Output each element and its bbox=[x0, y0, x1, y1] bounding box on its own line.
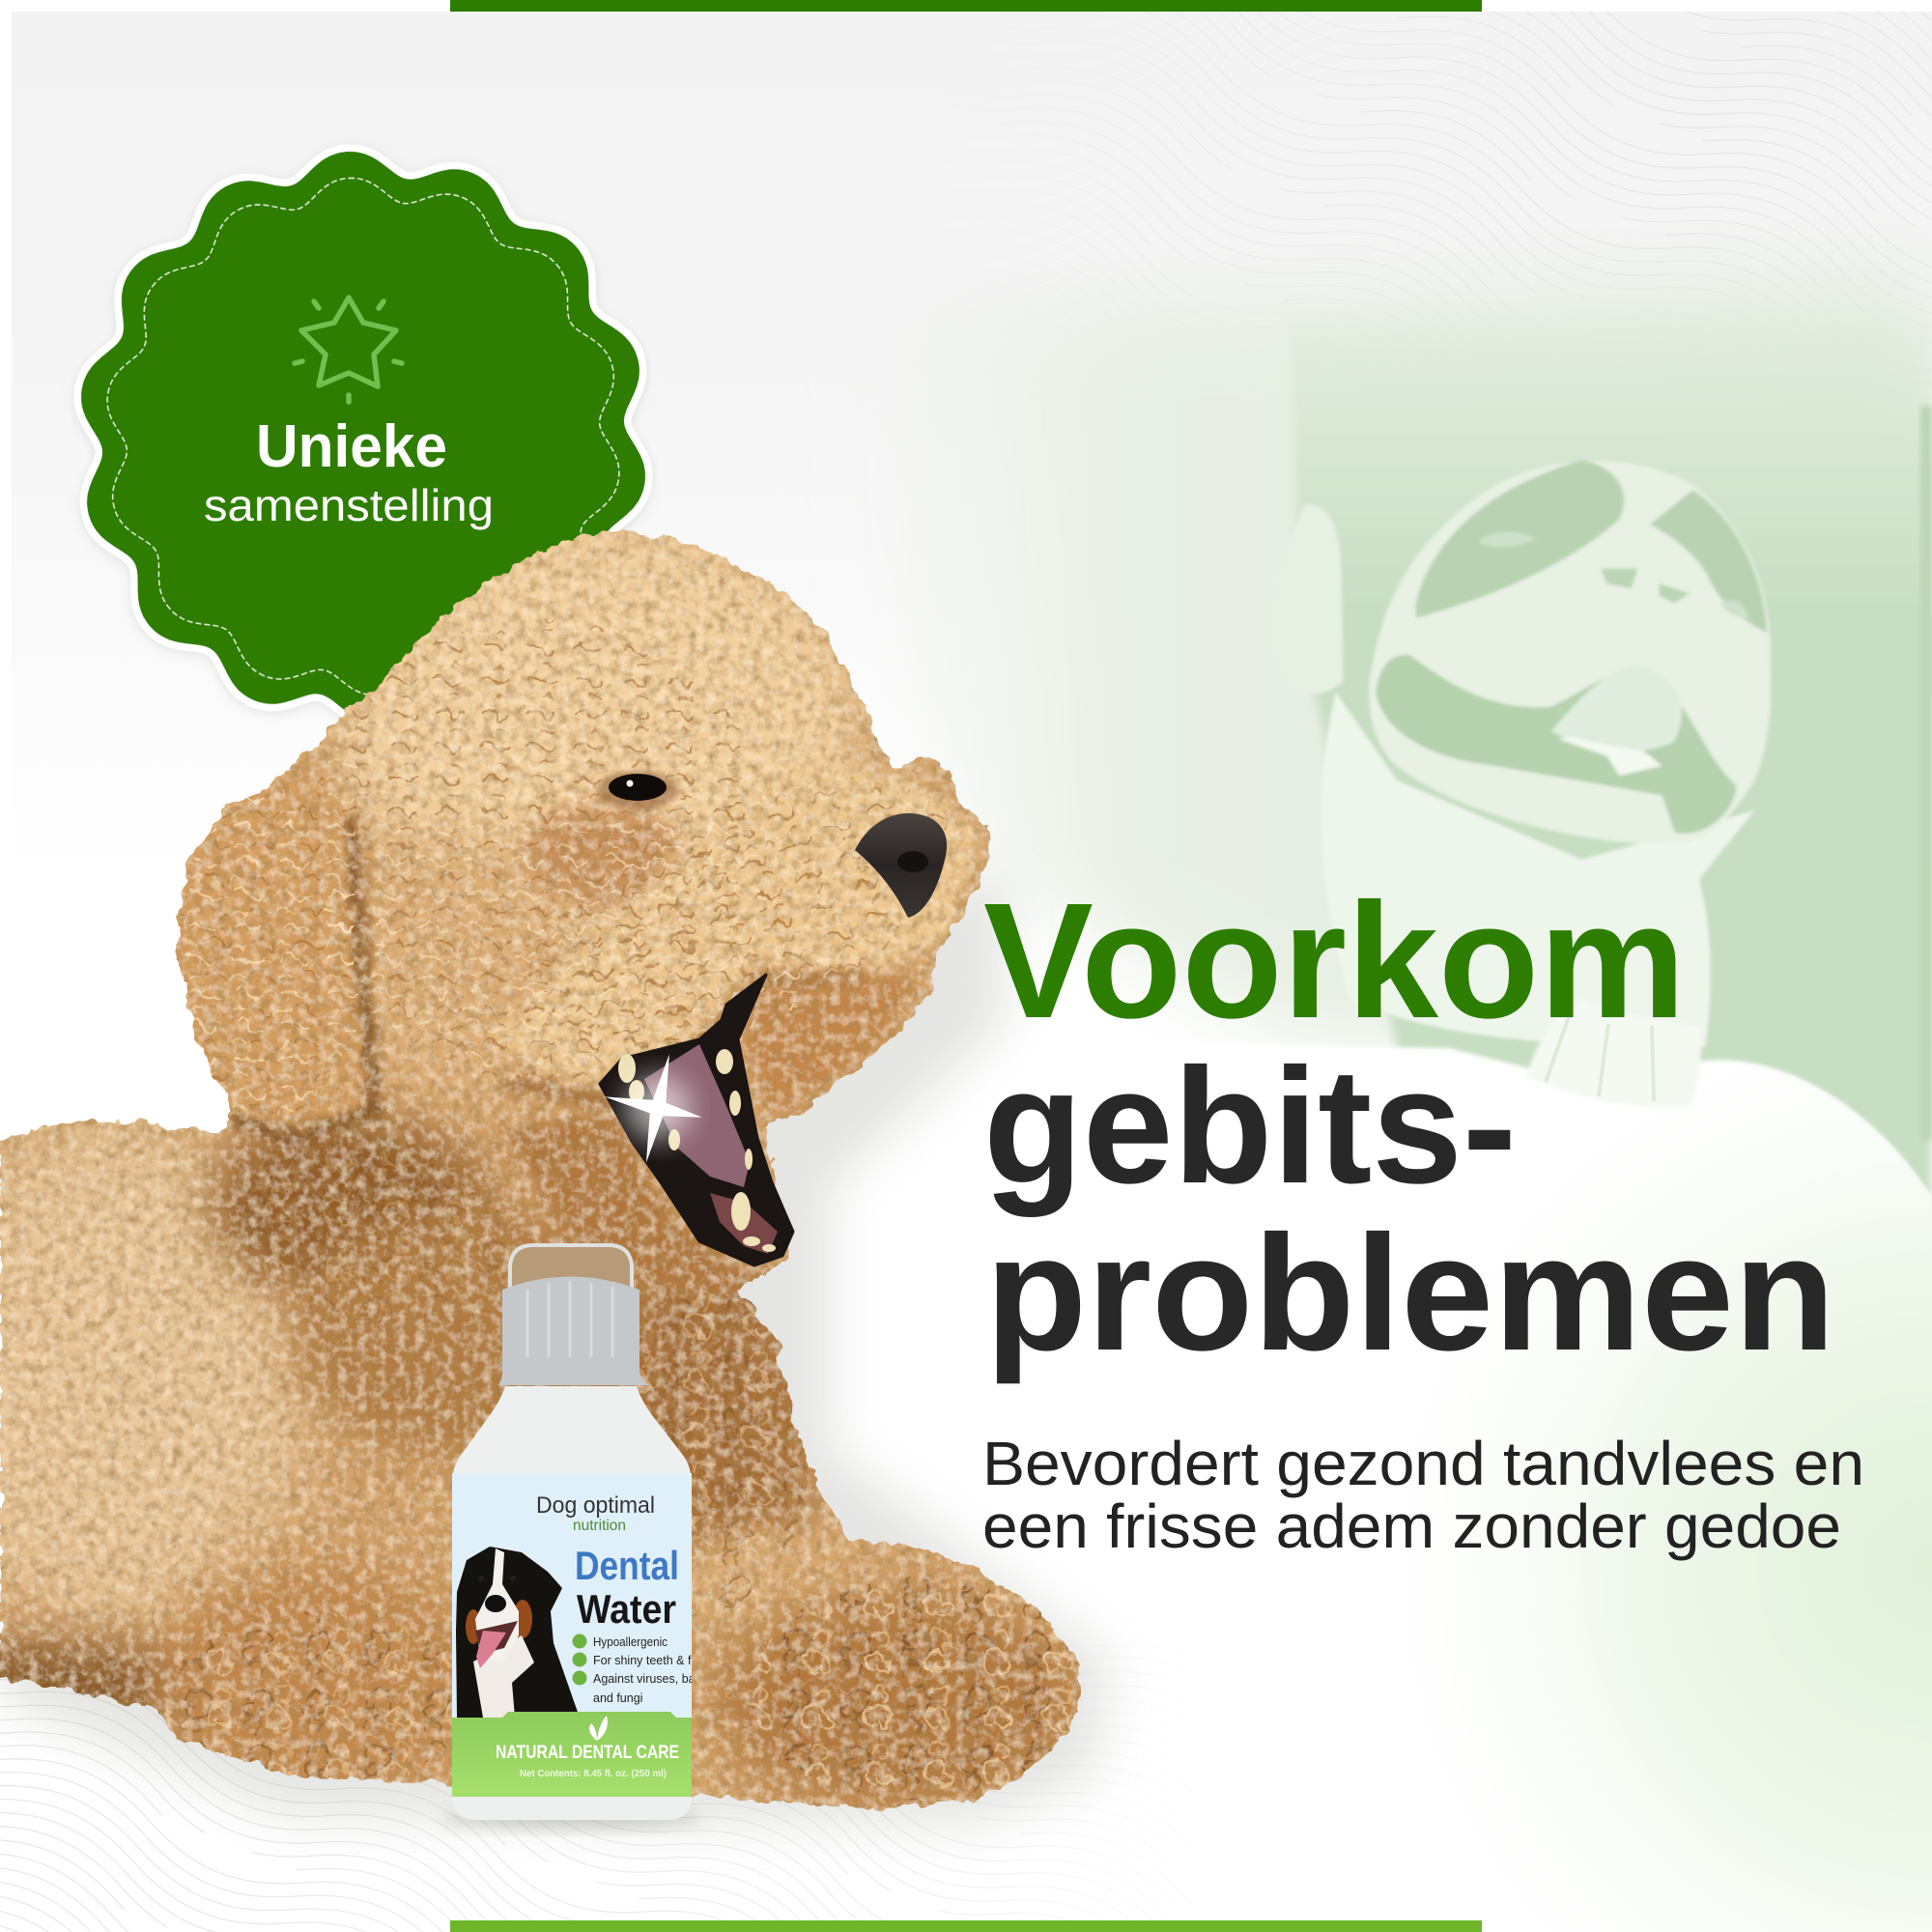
check bullets bbox=[572, 1634, 587, 1685]
dog head bbox=[1369, 461, 1771, 843]
bullet texts: For shiny teeth & fresh breath bbox=[593, 1654, 753, 1667]
neck shadow bbox=[208, 1116, 488, 1299]
chest bbox=[290, 1208, 657, 1459]
bullet texts: Hypoallergenic bbox=[593, 1635, 668, 1649]
subtext bbox=[982, 1429, 1864, 1561]
product word two: Water bbox=[577, 1586, 676, 1632]
pale person area bbox=[869, 270, 1932, 1063]
curl texture: foreleg bbox=[164, 1613, 473, 1787]
background: faded dog photo bbox=[869, 270, 1932, 1256]
lower-left belly bbox=[0, 1642, 213, 1729]
lower jaw fur bbox=[502, 1111, 744, 1304]
headline line three: problemen bbox=[985, 1202, 1835, 1385]
bullet texts: and fungi bbox=[593, 1691, 642, 1705]
bottle shoulder and body bbox=[452, 1386, 692, 1820]
headline line two: gebits- bbox=[983, 1035, 1517, 1218]
bottle bbox=[441, 1245, 753, 1830]
curl texture: chest bbox=[623, 1285, 807, 1613]
tongue bbox=[644, 1044, 750, 1187]
label background bbox=[452, 1473, 692, 1797]
ear crease bbox=[232, 821, 375, 1138]
bottom bar bbox=[450, 1920, 1482, 1932]
badge scalloped shape bbox=[41, 110, 686, 763]
fur base bbox=[0, 522, 1092, 1816]
green label band bbox=[452, 1712, 692, 1797]
foreleg top right bbox=[657, 1526, 889, 1642]
person collar bbox=[1268, 504, 1343, 694]
net contents: Net Contents: 8.45 fl. oz. (250 ml) bbox=[520, 1768, 667, 1779]
cap ridges bbox=[527, 1281, 612, 1357]
top bar bbox=[450, 0, 1482, 12]
brand sub: nutrition bbox=[573, 1518, 626, 1534]
under muzzle shadow bbox=[502, 980, 869, 1101]
teeth bbox=[618, 1049, 776, 1252]
mouth bbox=[593, 975, 793, 1265]
badge bbox=[41, 110, 686, 763]
bottle shadow bbox=[441, 1806, 702, 1830]
cap bbox=[498, 1277, 649, 1385]
upper lip bbox=[744, 976, 922, 1118]
poodle soft shadow bbox=[0, 869, 1111, 1826]
ghost dog bbox=[1268, 461, 1771, 1047]
label bbox=[452, 1473, 753, 1797]
subtext line two: een frisse adem zonder gedoe bbox=[982, 1492, 1841, 1561]
mouth interior bbox=[600, 975, 793, 1265]
neck side bbox=[338, 831, 570, 1101]
paw bbox=[715, 1594, 1082, 1806]
right eye patch bbox=[1650, 490, 1767, 633]
foreleg left bbox=[155, 1565, 483, 1797]
band title: NATURAL DENTAL CARE bbox=[496, 1743, 679, 1763]
ear bbox=[178, 763, 372, 1130]
icon: leaf bbox=[589, 1716, 608, 1741]
headline bbox=[983, 869, 1835, 1385]
subtext line one: Bevordert gezond tandvlees en bbox=[982, 1429, 1864, 1498]
label dog bbox=[456, 1547, 580, 1718]
cap top rim bbox=[510, 1245, 632, 1294]
under eye bbox=[522, 802, 686, 908]
gum bbox=[710, 1193, 778, 1254]
strand texture: head bbox=[309, 618, 773, 1082]
poodle bbox=[0, 517, 1092, 1816]
green backdrop bbox=[1290, 290, 1932, 1256]
chest right of bottle bbox=[599, 1246, 811, 1613]
curl texture: paw bbox=[749, 1579, 1087, 1802]
head crown bbox=[338, 517, 860, 932]
teeth bbox=[1557, 736, 1662, 776]
muzzle bbox=[488, 763, 982, 1089]
strand texture: ear bbox=[179, 792, 362, 1121]
nose bbox=[855, 813, 947, 918]
brand: Dog optimal bbox=[536, 1492, 655, 1519]
white arm foreground bbox=[966, 1038, 1932, 1932]
product word one: Dental bbox=[575, 1543, 679, 1588]
left eye patch bbox=[1416, 461, 1624, 618]
curl texture: neck bbox=[222, 1150, 512, 1323]
badge title: Unieke bbox=[256, 413, 447, 480]
lower-right green tint bbox=[1256, 1053, 1932, 1932]
wave pattern top right bbox=[1165, 12, 1932, 283]
icon: star with rays bbox=[295, 298, 402, 402]
ghost dog paw bbox=[1526, 998, 1701, 1107]
poodle fur bbox=[0, 517, 1092, 1816]
badge subtitle: samenstelling bbox=[204, 480, 494, 530]
sparkle bbox=[593, 1043, 714, 1173]
pale back bbox=[0, 1121, 309, 1623]
nostrils bbox=[1601, 569, 1690, 603]
backdrop right edge bbox=[1920, 406, 1932, 1140]
bullet texts: Against viruses, bacteria bbox=[593, 1672, 724, 1686]
dog body bbox=[1321, 692, 1754, 1047]
wave pattern bottom left bbox=[0, 1679, 1096, 1932]
strand texture: muzzle bbox=[479, 724, 989, 1112]
tongue bbox=[1551, 665, 1682, 751]
eye bbox=[597, 771, 678, 810]
headline line one: Voorkom bbox=[983, 869, 1686, 1053]
bullet texts bbox=[593, 1635, 753, 1705]
eyes bbox=[1481, 532, 1748, 618]
mouth interior bbox=[1376, 655, 1736, 834]
